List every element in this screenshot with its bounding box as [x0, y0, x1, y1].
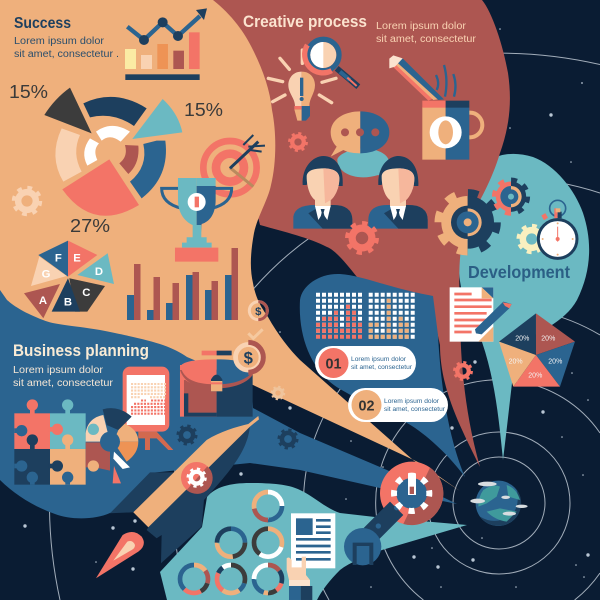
callout 02: sit amet, consectetur: [384, 406, 446, 413]
percentage labels: 15%: [9, 82, 48, 102]
pentagon pie chart: [499, 313, 575, 387]
text block: business planning: Lorem ipsum dolor: [13, 365, 104, 376]
icon: dollar coins: $: [244, 348, 254, 367]
icon: briefcase: [180, 351, 253, 417]
pixel chart right: [369, 295, 416, 337]
panel: business planning blob: [0, 280, 457, 518]
heading: development: Development: [468, 262, 570, 282]
text block: creative process: sit amet, consectetur: [376, 34, 477, 45]
icon: small coral gears: [290, 134, 472, 380]
text block: success: Lorem ipsum dolor: [14, 36, 105, 47]
rocket: [110, 416, 259, 563]
pentagon pie chart: 20%: [548, 358, 562, 365]
icon: easel with chart: [123, 367, 173, 450]
heading: creative process: Creative process: [243, 13, 367, 31]
icon: letter pie: [24, 241, 114, 318]
pentagon pie chart: 20%: [541, 336, 555, 343]
bar chart: [127, 248, 238, 320]
icon: magnifier: [305, 39, 358, 87]
icon: two business people: [293, 156, 428, 229]
callout 01: 01: [326, 356, 342, 372]
icon: dollar coins: $: [255, 306, 262, 318]
icon: development gears: [439, 180, 545, 252]
rocket flame: [96, 532, 144, 578]
panel: bottom teal blob: [160, 483, 467, 600]
percentage labels: 27%: [70, 216, 110, 236]
icon: trophy: [162, 178, 232, 262]
callout 02: 02: [358, 398, 374, 414]
text block: business planning: [13, 365, 114, 389]
icon: letter pie: F: [55, 253, 62, 265]
icon: speech bubbles: [331, 111, 390, 182]
percentage labels: [9, 82, 223, 236]
heading: success: Success: [14, 15, 71, 32]
panel: development blob: [458, 154, 589, 460]
icon: wrench and gear badge: [344, 462, 443, 565]
mini chart on easel: [131, 384, 166, 414]
icon: letter pie: A: [39, 295, 47, 307]
icon: puzzle: [14, 399, 110, 485]
pentagon pie chart: 20%: [509, 358, 523, 365]
icon: stopwatch: [538, 200, 577, 258]
icon: small pie: [100, 408, 138, 483]
planet earth: [470, 481, 528, 526]
donut charts: [180, 492, 282, 593]
callout 02: [348, 388, 448, 422]
exploded pie chart: [44, 88, 182, 216]
percentage labels: 15%: [184, 100, 223, 120]
panel: central blue blob: [300, 274, 465, 477]
icon: letter pie: E: [73, 253, 81, 265]
icon: light bulb: [268, 50, 336, 121]
icon: dark gears: [178, 426, 297, 448]
icon: coffee mug and pencil: [389, 55, 482, 160]
panel: creative process blob: [205, 0, 510, 467]
icon: hand holding document: [287, 513, 335, 600]
icon: dollar coins: [236, 302, 267, 372]
panel: success blob: [0, 0, 460, 491]
pixel chart left: [316, 295, 363, 337]
icon: document and pencil: [450, 287, 512, 342]
callout 01: sit amet, consectetur: [351, 364, 413, 371]
icon: letter pie: G: [42, 268, 51, 280]
text block: creative process: [376, 21, 477, 45]
pentagon pie chart: 20%: [528, 372, 542, 379]
icon: cream gear: [14, 188, 40, 214]
bar and line chart icon: [125, 8, 207, 80]
icon: peach gear: [272, 387, 284, 399]
callout 01: [315, 346, 416, 380]
icon: letter pie: D: [95, 266, 103, 278]
text block: creative process: Lorem ipsum dolor: [376, 21, 467, 32]
text block: business planning: sit amet, consectetur: [13, 378, 114, 389]
callout 01: Lorem ipsum dolor: [351, 356, 407, 363]
heading: business planning: Business planning: [13, 342, 149, 360]
text block: success: [14, 36, 119, 60]
icon: letter pie: C: [82, 287, 90, 299]
pentagon pie chart: 20%: [515, 336, 529, 343]
text block: success: sit amet, consectetur .: [14, 49, 119, 60]
callout 02: Lorem ipsum dolor: [384, 398, 440, 405]
icon: letter pie: B: [64, 296, 72, 308]
icon: target: [203, 135, 265, 194]
